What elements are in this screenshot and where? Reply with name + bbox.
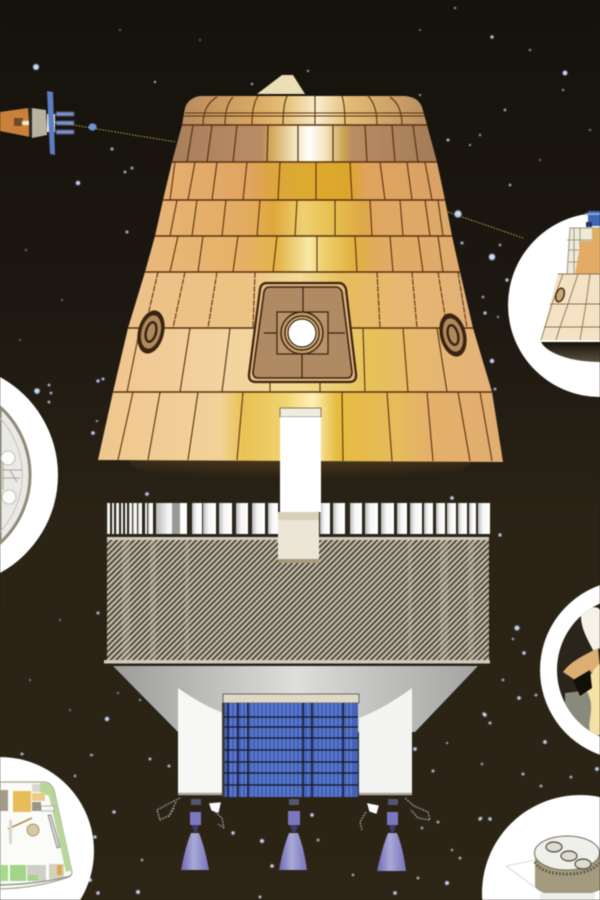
blue solar array [222, 694, 359, 797]
circle inset: bottom left cutaway capsule [0, 757, 94, 900]
capsule nose tip [257, 75, 305, 94]
left plumbing [157, 798, 224, 828]
circle inset: upper right capsule view [508, 211, 600, 397]
engine left [181, 799, 209, 870]
left white panel [178, 688, 223, 795]
right porthole [435, 311, 471, 359]
panel row 4 [145, 236, 460, 272]
engine right [377, 799, 406, 871]
panel row 1 [172, 125, 437, 162]
engine center [279, 799, 307, 870]
panel row 2 [163, 162, 445, 200]
dotted tether line left [55, 122, 176, 142]
panel base strip [178, 793, 412, 795]
glow below capsule [130, 443, 470, 483]
left porthole [133, 308, 169, 356]
panel row 3 [155, 200, 452, 236]
small spacecraft top left [0, 91, 96, 155]
center strap [278, 408, 321, 563]
main capsule body [98, 96, 503, 462]
panel row 5 [128, 272, 473, 328]
dotted tether line right [448, 212, 523, 238]
row seams [113, 125, 492, 392]
woven mesh module [104, 537, 490, 664]
central hatch window [249, 283, 356, 382]
panel row 7 [98, 382, 503, 462]
circle inset: bottom right drum module [482, 795, 600, 900]
panel row 6 [113, 328, 492, 392]
circle inset: left hatch view [0, 377, 58, 573]
right white panel [359, 688, 412, 795]
tapered lower skirt [113, 666, 478, 732]
right plumbing [360, 798, 430, 830]
circle inset: right mid photo of astronaut [540, 585, 600, 755]
dome cap [182, 96, 427, 125]
striped radiator band [106, 502, 491, 535]
